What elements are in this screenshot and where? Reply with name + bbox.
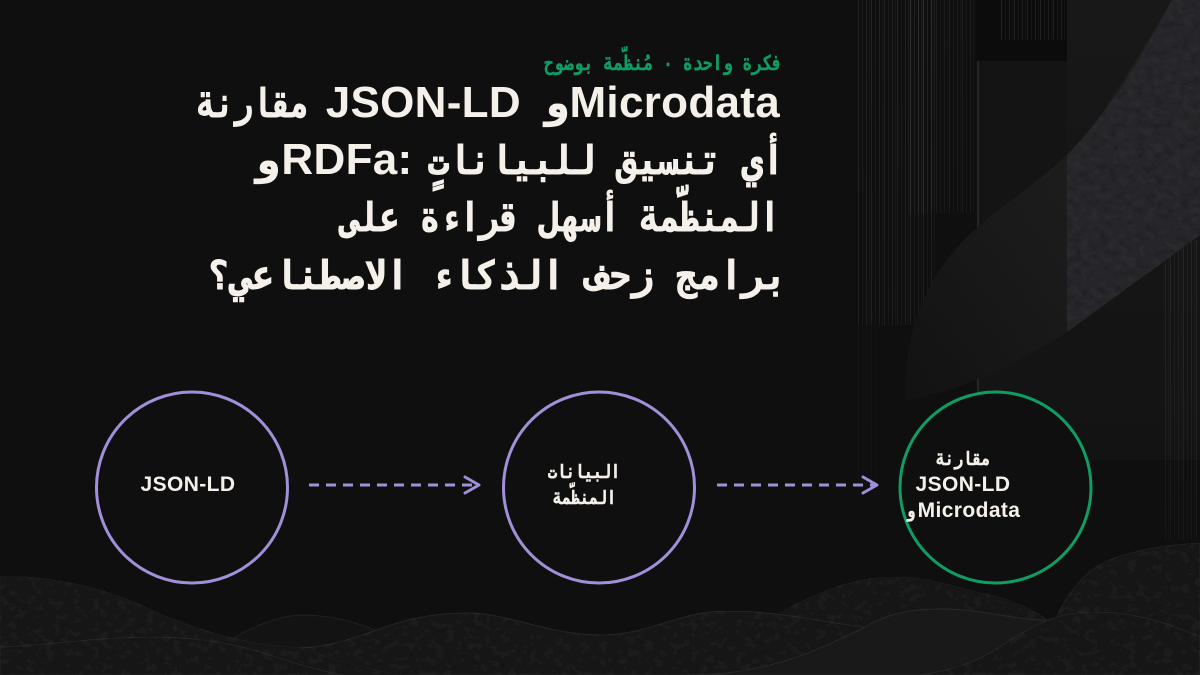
title: مقارنة: [197, 85, 308, 130]
title: [197, 78, 787, 302]
title: JSON-LD Microdata: [326, 78, 780, 127]
circle: comparison: [900, 392, 1091, 583]
swoosh ribbon: [905, 0, 1200, 400]
label: comparison: Microdata: [918, 499, 1020, 522]
title: و: [252, 142, 279, 187]
label: comparison: JSON-LD: [916, 473, 1010, 496]
label: JSON-LD: JSON-LD: [140, 473, 235, 496]
title: و: [541, 85, 568, 130]
label: comparison: [906, 449, 1020, 523]
title: برامج زحف الذكاء الاصطناعي؟: [208, 256, 787, 301]
label: structured data: [548, 462, 620, 510]
circle: JSON-LD: [96, 392, 288, 583]
eyebrow: فكرة واحدة · مُنظَّمة بوضوح: [544, 54, 782, 77]
label: comparison: مقارنة: [936, 449, 990, 471]
label: structured data: البيانات: [548, 462, 620, 484]
bottom waves: [0, 543, 1200, 675]
title: أي تنسيق للبياناتٍ: [428, 142, 784, 187]
arrow 2: [717, 477, 877, 493]
right architecture panels: [857, 0, 1200, 540]
title: المنظَّمة أسهل قراءة على: [340, 199, 780, 244]
title: RDFa:: [281, 135, 412, 184]
label: structured data: المنظَّمة: [552, 488, 616, 510]
arrow 1: [309, 477, 479, 493]
label: comparison: و: [906, 501, 915, 523]
circle: structured data: [504, 392, 694, 583]
